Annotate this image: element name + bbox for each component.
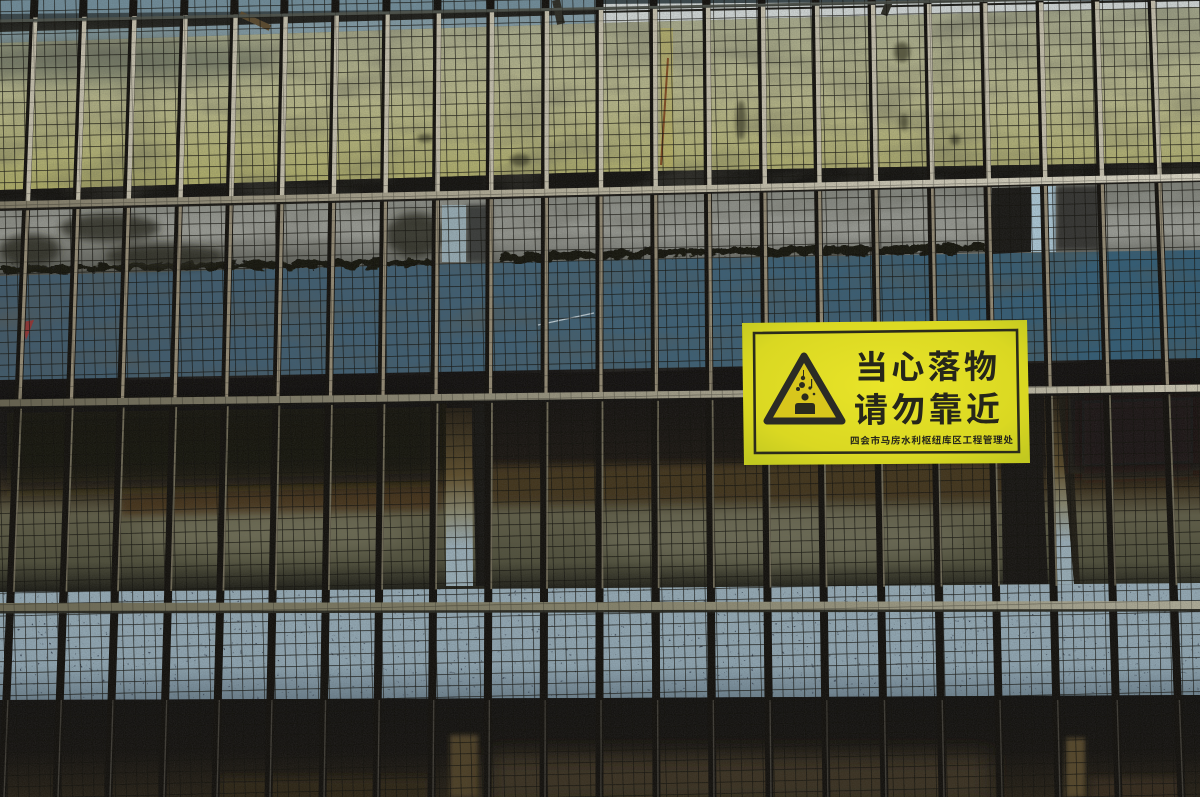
rusty tide line, right part [490, 462, 1000, 503]
brown patch in base, right column [1066, 738, 1085, 797]
red mark on blue band [22, 320, 34, 340]
light patch in stained wall [130, 515, 410, 555]
overhang stub at top right [884, 0, 890, 15]
cloudy mottling on upper walls [0, 0, 1200, 400]
top thin rail [0, 0, 1200, 21]
overhang stub at top centre [556, 0, 561, 24]
stained lower wall [0, 390, 1200, 592]
dark ledge under blue band [0, 358, 1200, 410]
right pillars in stained wall [1000, 396, 1048, 584]
overhang stub at top left [240, 14, 270, 28]
brown haze in base, left [220, 778, 430, 797]
sign inner border [754, 330, 1019, 453]
bright upper bars [26, 0, 1162, 201]
middle bars [18, 182, 1170, 400]
middle rail [0, 388, 1200, 407]
triangle outline [767, 356, 842, 421]
pale column in stained wall [446, 408, 473, 586]
brown haze in base, right [1090, 778, 1180, 797]
grey mid wall [0, 178, 1200, 278]
left darkening of olive wall [0, 38, 280, 82]
brown haze in base, centre [490, 755, 990, 797]
person head [801, 393, 809, 401]
caution sign [742, 320, 1030, 465]
person body [795, 403, 815, 414]
yellowed panel with rust streak [660, 28, 673, 168]
blue painted wall band [0, 250, 1200, 382]
icon: warning triangle with falling objects over a person [767, 356, 842, 421]
lower thin bars [12, 394, 1178, 592]
grime patches left of grey band [0, 213, 445, 268]
upper rail [0, 177, 1200, 209]
sign headline line 2: 请勿靠近 [854, 391, 1004, 430]
dark column beside pale column [472, 404, 490, 586]
dark pillars mid band [466, 205, 492, 262]
sign issuer line: 四会市马房水利枢纽库区工程管理处 [850, 434, 1013, 447]
brown patch in base, left column [450, 735, 478, 797]
dark edge of pale wedge [1058, 394, 1080, 584]
olive upper wall [0, 7, 1200, 190]
white scratch on blue band [538, 313, 594, 325]
dark band on right stained wall [1075, 390, 1200, 474]
light patch, right of column [590, 516, 970, 564]
pale blue wall band [0, 583, 1200, 700]
falling debris [796, 370, 815, 395]
sign headline line 1: 当心落物 [855, 348, 1001, 386]
lower rail [0, 605, 1200, 612]
top strip above the wall [0, 0, 1200, 45]
pale wedge at right [1044, 394, 1074, 584]
sign board [742, 320, 1030, 465]
grime line on grey band, right part [500, 248, 985, 258]
black specks on pale band [0, 585, 1200, 705]
rusty tide line in stained wall [120, 486, 440, 516]
dark ledge under olive wall [0, 162, 1200, 210]
dark drip marks [417, 42, 960, 166]
grime line on grey band, left part [0, 262, 440, 270]
dark base [0, 695, 1200, 797]
dark shade over top of stained wall [0, 400, 440, 490]
base thin bars [3, 700, 1184, 797]
